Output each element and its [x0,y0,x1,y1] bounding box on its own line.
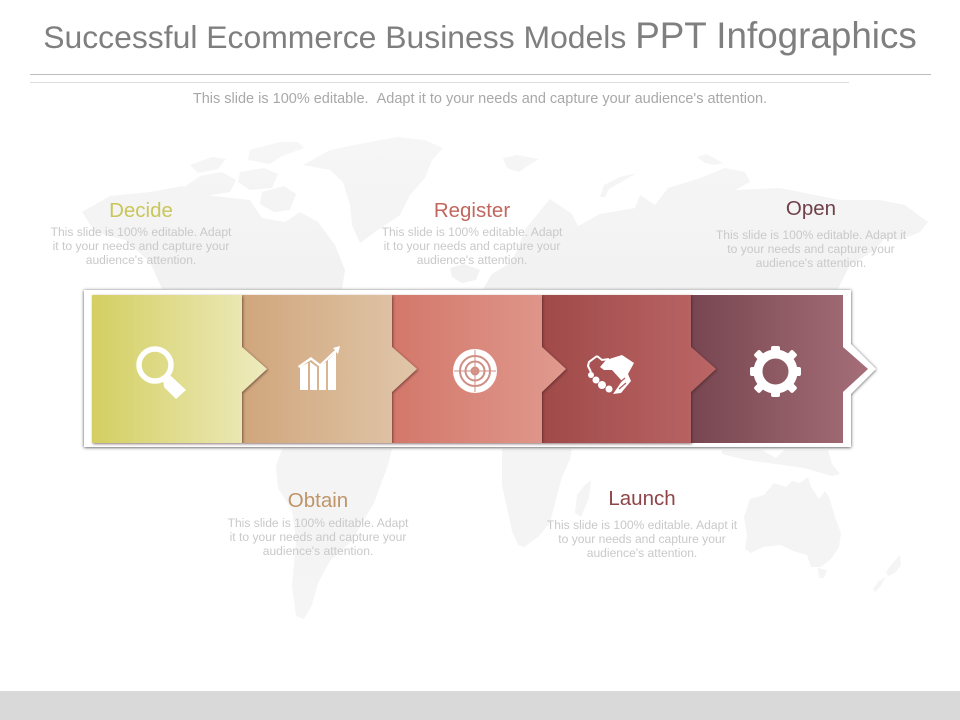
text: Register description: it to your needs and capture your [384,239,560,253]
text: Open description [716,228,906,270]
icon: gear [750,346,801,397]
text: Launch description: to your needs and capture your [558,532,726,546]
text: Decide description [50,225,232,267]
text: Decide description: it to your needs and capture your [53,239,229,253]
text: Obtain description: it to your needs and capture your [230,530,406,544]
text: Decide description: audience's attention. [86,253,196,267]
icon: target [453,349,497,393]
text: Register description: audience's attention. [417,253,527,267]
step 5: open [691,295,868,443]
text: Open description: audience's attention. [756,256,866,270]
heading: Open: Open [786,197,836,220]
step 3: register [392,295,566,443]
white arrow frame [84,290,876,447]
heading: Launch: Launch [608,487,676,510]
text: Launch description: This slide is 100% editable. Adapt it [547,518,737,532]
text: Launch description: audience's attention. [587,546,697,560]
icon: growth chart [298,346,340,390]
text: Obtain description: audience's attention. [263,544,373,558]
heading: Obtain: Obtain [288,489,348,512]
title: Successful Ecommerce Business Models PPT Infographics [43,15,917,56]
subtitle rule [30,82,849,83]
step 1: decide [92,295,267,443]
text: Obtain description [228,516,408,558]
text: Obtain description: This slide is 100% editable. Adapt [228,516,408,530]
text: Decide description: This slide is 100% editable. Adapt [51,225,231,239]
footer bar [0,691,960,720]
icon: handshake [588,355,634,394]
subtitle: This slide is 100% editable. Adapt it to your needs and capture your audience's attention. [193,91,767,107]
title rule [30,74,931,75]
text: Open description: This slide is 100% editable. Adapt it [716,228,906,242]
text: Launch description [547,518,737,560]
heading: Register: Register [434,199,510,222]
step 4: launch [542,295,716,443]
heading: Decide: Decide [109,199,173,222]
step 2: obtain [242,295,417,443]
text: Register description [382,225,562,267]
icon: magnifying glass [139,349,186,399]
text: Register description: This slide is 100% editable. Adapt [382,225,562,239]
text: Open description: to your needs and capture your [727,242,895,256]
